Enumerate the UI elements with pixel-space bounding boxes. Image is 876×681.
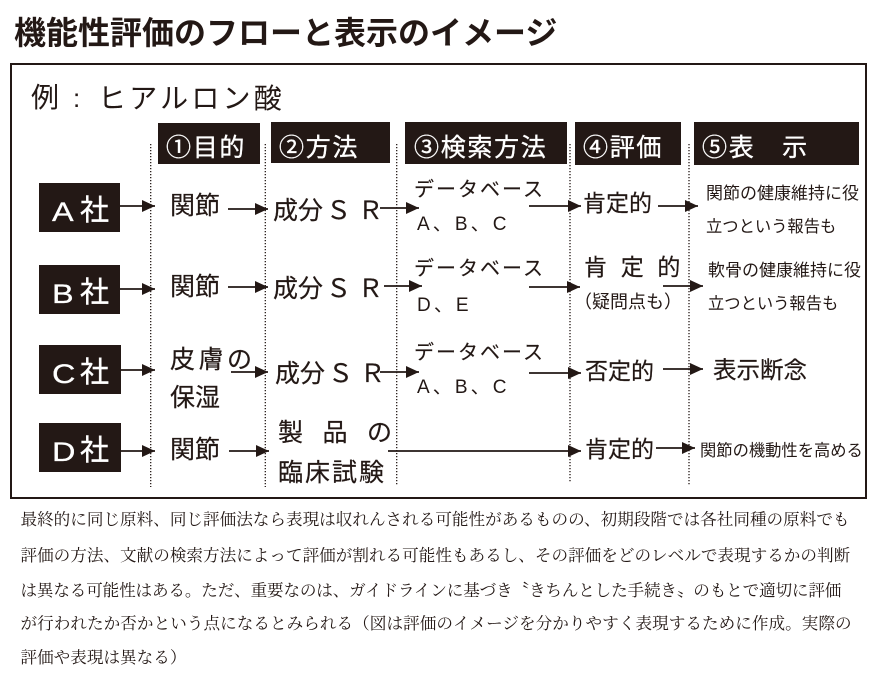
- row C text: 皮膚の: [170, 346, 256, 374]
- company B: 社: [80, 277, 109, 309]
- row A text: [170, 178, 859, 236]
- company D: D: [52, 437, 75, 467]
- row A text: 立つという報告も: [706, 218, 836, 236]
- row B text: 成分ＳＲ: [273, 275, 390, 303]
- row B text: D、E: [417, 295, 472, 316]
- row B text: 軟骨の健康維持に役: [708, 261, 861, 280]
- company B: [39, 265, 120, 314]
- example label: ヒアルロン酸: [98, 83, 285, 114]
- company A: A: [52, 197, 74, 227]
- row B text: （疑問点も）: [574, 292, 682, 312]
- header: labeling: [694, 122, 859, 165]
- arrows: row B: [120, 286, 703, 289]
- company D: [39, 423, 121, 472]
- row A text: 成分ＳＲ: [273, 197, 390, 225]
- company C: C: [52, 359, 75, 389]
- row B text: 肯定的: [584, 254, 694, 280]
- company A: 社: [80, 195, 109, 227]
- company B: B: [52, 279, 74, 309]
- arrows: row C: [121, 369, 703, 373]
- header: method: [271, 122, 390, 163]
- header: search method: [405, 122, 567, 164]
- row B text: データベース: [414, 258, 545, 280]
- row C text: 表示断念: [713, 357, 807, 383]
- caption paragraph: は異なる可能性はある。ただ、重要なのは、ガイドラインに基づき〝きちんとした手続き〟のもとで適切に評価: [20, 581, 841, 600]
- row A text: 肯定的: [583, 190, 652, 216]
- row D text: 肯定的: [585, 436, 654, 462]
- row D text: [170, 419, 863, 487]
- arrows: row A: [120, 206, 698, 209]
- row A text: A、B、C: [417, 214, 510, 235]
- row D text: 関節の機動性を高める: [700, 442, 863, 460]
- panel: flow diagram: [10, 63, 867, 499]
- row D text: 臨床試験: [278, 459, 386, 487]
- header: purpose: ①目的: [166, 134, 246, 162]
- company D: 社: [80, 435, 109, 467]
- header: search method: ③検索方法: [414, 134, 548, 162]
- company C: [39, 345, 121, 394]
- header: labeling: ⑤表 示: [702, 134, 809, 162]
- row A text: 関節の健康維持に役: [706, 184, 859, 203]
- row B text: [170, 254, 861, 316]
- arrows: row D: [121, 448, 695, 451]
- caption paragraph: 評価の方法、文献の検索方法によって評価が割れる可能性もあるし、その評価をどのレベルで表現するかの判断: [20, 546, 850, 565]
- company C: 社: [80, 357, 109, 389]
- row D text: 製品の: [278, 419, 412, 447]
- title: 機能性評価のフローと表示のイメージ: [14, 15, 557, 51]
- caption paragraph: 最終的に同じ原料、同じ評価法なら表現は収れんされる可能性があるものの、初期段階では各社同種の原料でも: [20, 510, 850, 529]
- row C text: [170, 342, 807, 412]
- row B text: 立つという報告も: [708, 295, 838, 313]
- row C text: 保湿: [170, 384, 220, 412]
- row A text: 関節: [170, 192, 220, 220]
- header: purpose: [158, 123, 260, 164]
- row D text: 関節: [170, 436, 220, 464]
- row C text: 成分ＳＲ: [275, 360, 392, 388]
- header: evaluation: [575, 122, 681, 165]
- example label: 例: [31, 82, 59, 113]
- caption paragraph: [20, 510, 852, 667]
- caption paragraph: が行われたか否かという点になるとみられる（図は評価のイメージを分かりやすく表現するために作成。実際の: [20, 614, 852, 633]
- row C text: データベース: [414, 342, 545, 364]
- header: method: ②方法: [279, 134, 359, 162]
- caption paragraph: 評価や表現は異なる）: [20, 648, 186, 667]
- company A: [39, 183, 120, 232]
- row A text: データベース: [414, 179, 545, 201]
- row C text: 否定的: [585, 358, 654, 384]
- row B text: 関節: [170, 273, 220, 301]
- row C text: A、B、C: [417, 377, 510, 398]
- example label: :: [73, 83, 80, 113]
- header: evaluation: ④評価: [583, 134, 663, 162]
